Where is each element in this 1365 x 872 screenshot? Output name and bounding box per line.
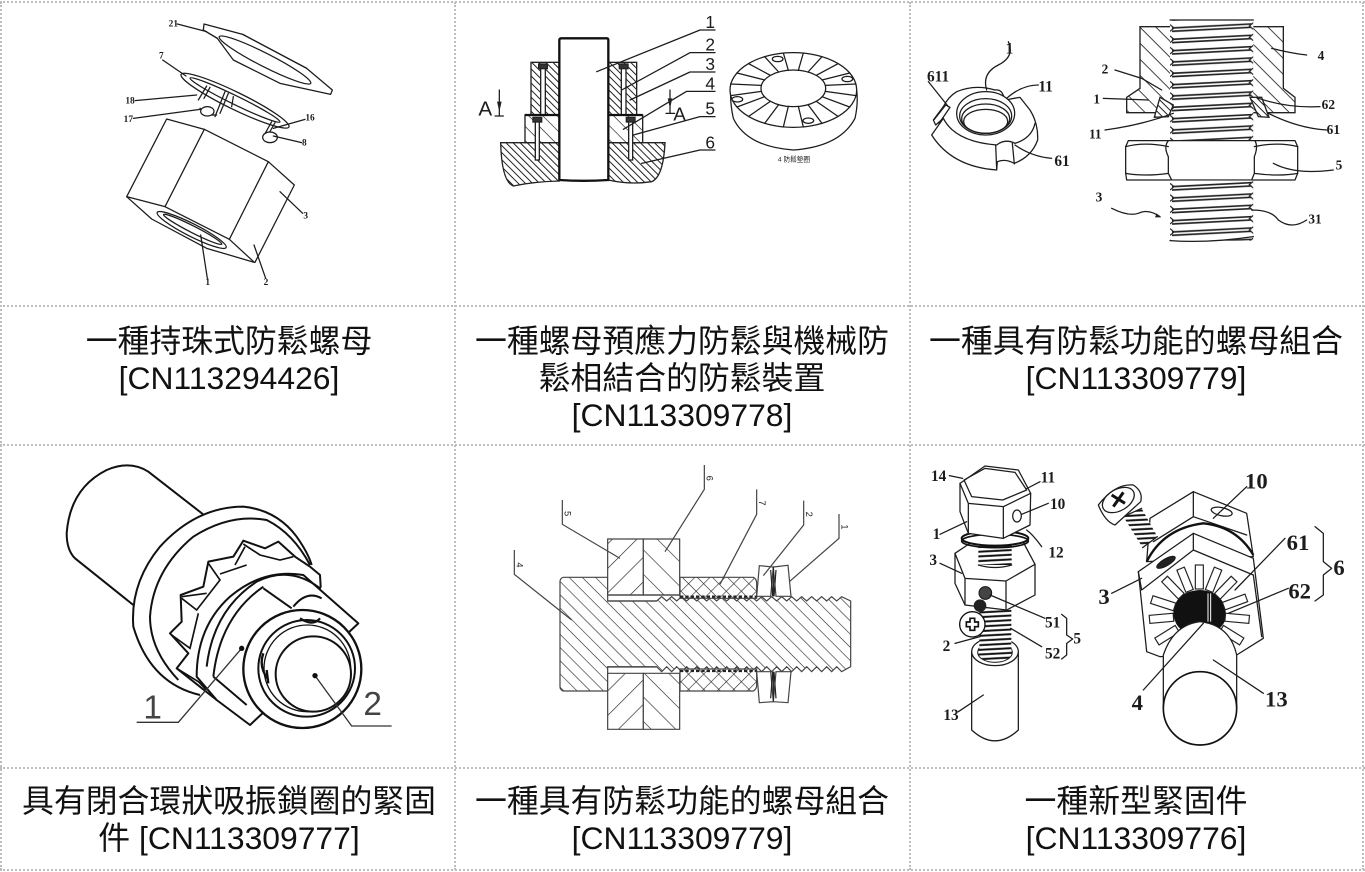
diagram: exploded fastener and assembled view: 13 — [943, 707, 959, 724]
diagram: exploded fastener and assembled view: 51 — [1045, 614, 1060, 631]
caption: 鬆相結合的防鬆裝置 — [539, 360, 825, 396]
diagram: section view and washer: 5 — [705, 98, 715, 118]
caption: 一種螺母預應力防鬆與機械防 — [475, 323, 889, 359]
diagram: exploded ball nut: 8 — [302, 139, 307, 149]
diagram: exploded fastener and assembled view: 11 — [1041, 469, 1055, 486]
panel: nut assembly section drawing — [475, 465, 889, 856]
panel: ball-holding anti-loosening nut — [86, 19, 372, 396]
diagram: exploded fastener and assembled view: 61 — [1287, 530, 1309, 555]
diagram: exploded ball nut: 17 — [124, 115, 133, 125]
diagram: nut and bolt section: 61 — [1327, 122, 1340, 137]
diagram: exploded ball nut: 16 — [305, 114, 315, 124]
diagram: section view and washer: 6 — [705, 132, 715, 152]
caption: [CN113294426] — [119, 360, 339, 396]
diagram: nut and bolt section: 611 — [927, 69, 949, 86]
diagram: exploded fastener and assembled view: 13 — [1265, 687, 1288, 712]
diagram: section view and washer: 3 — [705, 54, 715, 74]
diagram: section view and washer: 1 — [705, 12, 715, 32]
diagram: nut and bolt section: 61 — [1054, 153, 1070, 170]
diagram: horizontal bolt section: 7 — [757, 500, 767, 506]
diagram: nut and bolt section: 1 — [1006, 40, 1013, 57]
diagram: exploded fastener and assembled view: 10 — [1245, 468, 1268, 493]
diagram: nut and bolt section: 4 — [1318, 48, 1325, 63]
caption: 具有閉合環狀吸振鎖圈的緊固 — [22, 783, 436, 819]
diagram: nut and bolt section: 62 — [1322, 97, 1335, 112]
caption — [22, 783, 436, 856]
caption: 一種具有防鬆功能的螺母組合 — [475, 783, 889, 819]
caption: [CN113309779] — [572, 820, 792, 856]
diagram: exploded ball nut: 2 — [264, 278, 269, 288]
diagram: section view and washer: 4 — [705, 73, 715, 93]
diagram: nut and bolt section: 11 — [1089, 126, 1102, 141]
diagram: exploded fastener and assembled view: 6 — [1333, 555, 1345, 580]
diagram: horizontal bolt section: 1 — [839, 524, 849, 530]
caption — [475, 783, 889, 856]
caption — [475, 323, 889, 433]
diagram: nut and bolt section: 11 — [1038, 79, 1053, 96]
diagram: exploded ball nut: 18 — [125, 96, 135, 106]
diagram: exploded ball nut: 3 — [303, 211, 308, 221]
diagram: exploded fastener and assembled view: 10 — [1050, 496, 1066, 513]
diagram: fastener perspective — [66, 464, 392, 730]
diagram: horizontal bolt section — [514, 465, 852, 730]
diagram: nut and bolt section: 3 — [1096, 190, 1103, 205]
right view — [1147, 492, 1253, 562]
panel: fastener with closed ring vibration absorbing lock ring — [22, 464, 436, 856]
diagram: horizontal bolt section: 5 — [563, 511, 573, 516]
caption — [86, 323, 372, 396]
caption: [CN113309779] — [1026, 360, 1246, 396]
panel: nut assembly with locking function — [927, 19, 1343, 396]
diagram: exploded fastener and assembled view: 14 — [931, 468, 947, 485]
diagram: nut and bolt section: 1 — [1093, 91, 1100, 106]
diagram: horizontal bolt section: 4 — [515, 562, 525, 568]
caption: [CN113309778] — [572, 397, 792, 433]
diagram: horizontal bolt section: 2 — [804, 512, 814, 517]
diagram: exploded fastener and assembled view: 52 — [1045, 645, 1060, 662]
panel: nut preload and mechanical anti-loosening device — [475, 12, 889, 433]
caption: 一種新型緊固件 — [1025, 783, 1247, 819]
diagram: nut and bolt section — [927, 19, 1343, 242]
caption — [929, 323, 1343, 396]
diagram: nut and bolt section: 2 — [1102, 61, 1109, 76]
diagram: section view and washer: 4 防鬆墊圈 — [778, 155, 810, 164]
diagram: fastener perspective: 1 — [143, 689, 162, 726]
diagram: nut and bolt section: 31 — [1308, 211, 1322, 226]
diagram: exploded ball nut: 7 — [159, 52, 164, 62]
diagram: exploded ball nut — [124, 19, 333, 288]
caption: 一種具有防鬆功能的螺母組合 — [929, 323, 1343, 359]
diagram: section view and washer: 2 — [705, 35, 715, 55]
diagram: exploded fastener and assembled view: 5 — [1073, 630, 1081, 647]
caption: 件 [CN113309777] — [98, 820, 360, 856]
diagram: horizontal bolt section: 6 — [705, 476, 715, 481]
caption: 一種持珠式防鬆螺母 — [86, 323, 372, 359]
diagram: exploded fastener and assembled view: 4 — [1132, 690, 1143, 715]
diagram: exploded fastener and assembled view: 62 — [1288, 578, 1311, 603]
diagram: exploded fastener and assembled view: 2 — [943, 638, 950, 655]
diagram: exploded fastener and assembled view — [929, 465, 1345, 746]
diagram: section view and washer — [478, 12, 858, 187]
diagram: exploded fastener and assembled view: 3 — [1098, 584, 1110, 609]
diagram: section view and washer: A — [478, 98, 492, 121]
diagram: exploded ball nut: 1 — [205, 278, 210, 288]
panel: new type fastener — [929, 465, 1345, 856]
diagram: section view and washer: A — [673, 104, 686, 125]
diagram: fastener perspective: 2 — [363, 686, 382, 723]
diagram: exploded fastener and assembled view: 3 — [929, 552, 937, 569]
caption — [1025, 783, 1247, 856]
diagram: nut and bolt section: 5 — [1336, 157, 1343, 172]
caption: [CN113309776] — [1026, 820, 1246, 856]
diagram: exploded ball nut: 21 — [169, 19, 178, 29]
diagram: exploded fastener and assembled view: 12 — [1048, 545, 1064, 562]
diagram: exploded fastener and assembled view: 1 — [933, 526, 940, 543]
